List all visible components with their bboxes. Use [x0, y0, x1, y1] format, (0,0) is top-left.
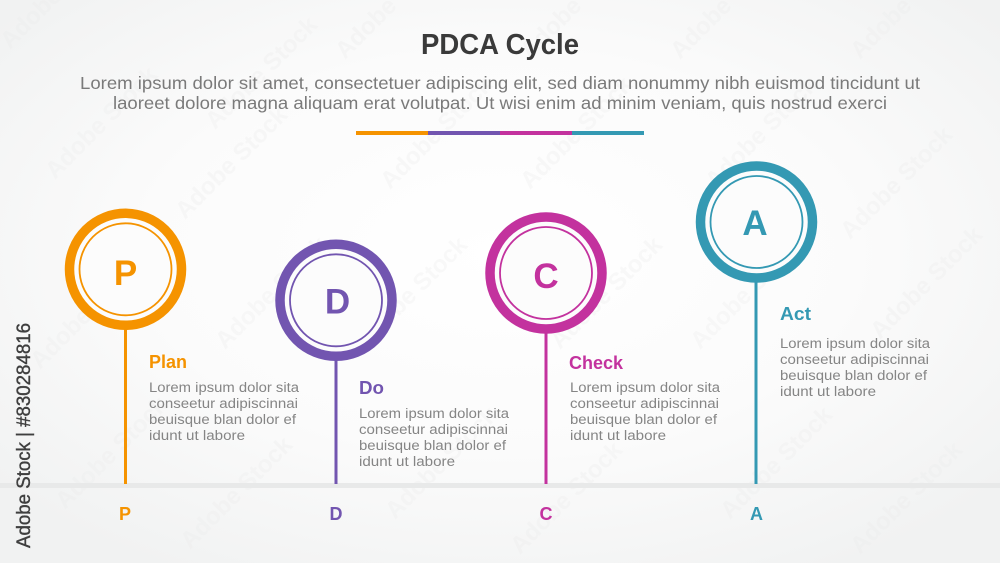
stem: C	[544, 332, 548, 484]
text: Adobe Stock	[685, 231, 808, 354]
text: Adobe Stock	[50, 391, 173, 514]
vertical stock credit: Adobe Stock | #830284816	[14, 323, 35, 548]
text block: Do	[359, 406, 510, 469]
text: Adobe Stock	[845, 436, 968, 559]
heading: Act: Act	[780, 304, 811, 324]
text block: Act: idunt ut labore	[780, 384, 876, 399]
text block: Do: beuisque blan dolor ef	[359, 438, 506, 453]
axis label: P: P	[119, 504, 131, 524]
heading: Do: Do	[359, 378, 384, 398]
text block: Check: conseetur adipiscinnai	[570, 396, 719, 411]
text: Adobe Stock	[350, 231, 473, 354]
colour divider bar	[356, 131, 644, 135]
title: PDCA Cycle	[421, 29, 579, 61]
text block: Check: Lorem ipsum dolor sita	[570, 380, 721, 395]
icon: D circle: D	[325, 282, 350, 322]
stem: D	[334, 359, 338, 484]
icon: C circle: C	[533, 257, 559, 296]
icon: P circle: P	[114, 254, 137, 293]
text block: Plan: beuisque blan dolor ef	[149, 412, 296, 427]
panel: Do	[280, 244, 510, 524]
text block: Do: Lorem ipsum dolor sita	[359, 406, 510, 421]
subtitle text block: Lorem ipsum dolor sit amet, consectetuer adipiscing elit, sed diam nonummy nibh euismod tincidunt ut	[80, 73, 920, 93]
text block: Do: conseetur adipiscinnai	[359, 422, 508, 437]
stem: A	[754, 281, 758, 484]
subtitle text block	[80, 73, 920, 113]
text block: Plan: idunt ut labore	[149, 428, 245, 443]
text block: Act	[780, 336, 931, 399]
icon: A circle: A	[742, 204, 768, 243]
text: Adobe Stock	[700, 71, 823, 194]
icon: D circle	[280, 244, 392, 356]
text: Adobe Stock	[835, 121, 958, 244]
subtitle text block: laoreet dolore magna aliquam erat volutpat. Ut wisi enim ad minim veniam, quis nostrud exerci	[113, 93, 887, 113]
stem: P	[124, 328, 127, 484]
text block: Check: beuisque blan dolor ef	[570, 412, 717, 427]
text: Adobe Stock	[25, 251, 148, 374]
text: Adobe Stock	[175, 431, 298, 554]
panel: Check	[490, 217, 721, 524]
text: Adobe Stock	[515, 71, 638, 194]
text: Adobe Stock	[375, 71, 498, 194]
text: Adobe Stock	[380, 401, 503, 524]
text: Adobe Stock	[865, 221, 988, 344]
text block: Do: idunt ut labore	[359, 454, 455, 469]
text: Adobe Stock	[715, 401, 838, 524]
text: Adobe Stock	[200, 11, 323, 134]
text block: Act: conseetur adipiscinnai	[780, 352, 929, 367]
text: Adobe Stock	[170, 101, 293, 224]
panel: Act	[700, 166, 931, 524]
text block: Plan: conseetur adipiscinnai	[149, 396, 298, 411]
text block: Check: idunt ut labore	[570, 428, 666, 443]
text block: Plan	[149, 380, 300, 443]
heading: Plan: Plan	[149, 352, 187, 372]
text: Adobe Stock	[545, 231, 668, 354]
icon: A circle	[700, 166, 812, 278]
text block: Act: beuisque blan dolor ef	[780, 368, 927, 383]
text block: Act: Lorem ipsum dolor sita	[780, 336, 931, 351]
text: Adobe Stock	[505, 436, 628, 559]
axis label: C: C	[540, 504, 552, 524]
panel: Plan	[70, 213, 300, 524]
icon: C circle	[490, 217, 602, 329]
axis label: A: A	[750, 504, 763, 524]
text block: Plan: Lorem ipsum dolor sita	[149, 380, 300, 395]
heading: Check: Check	[569, 353, 624, 373]
text: Adobe Stock	[40, 61, 163, 184]
axis label: D: D	[330, 504, 342, 524]
text block: Check	[570, 380, 721, 443]
icon: P circle	[70, 213, 182, 325]
text: Adobe Stock	[210, 231, 333, 354]
